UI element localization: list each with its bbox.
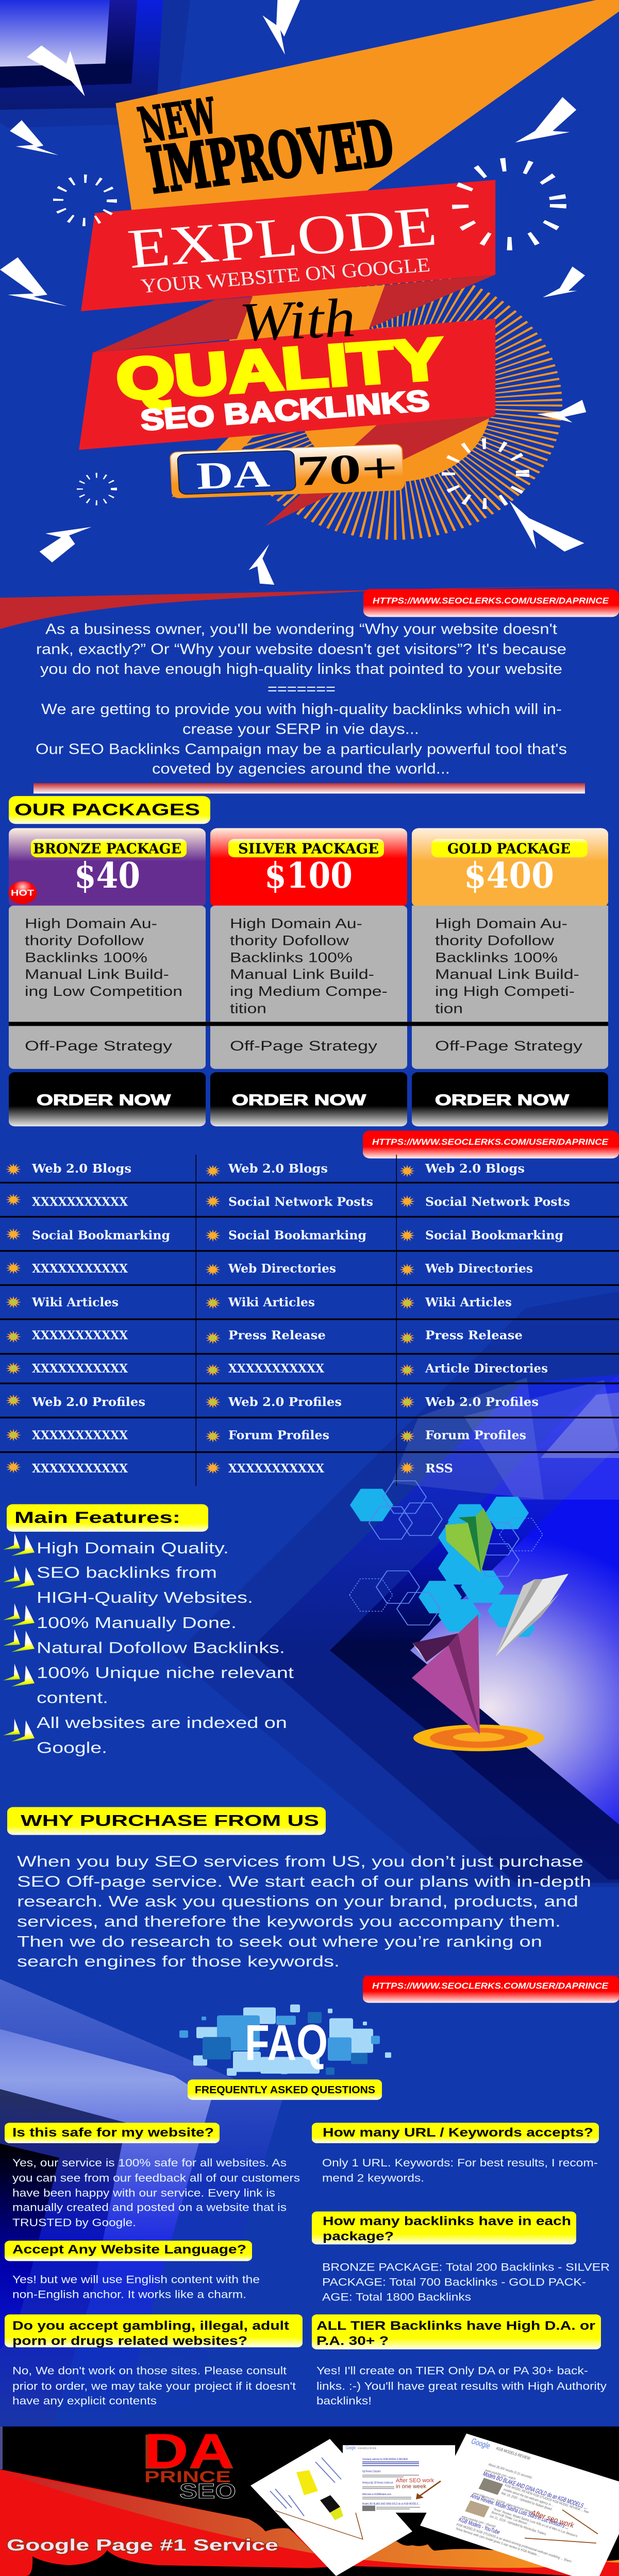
screenshot: center page: Working at kgb: 320 Reviews | Indeed.com xyxy=(362,2481,393,2484)
bronze features xyxy=(9,906,206,1069)
heading: frequently asked questions xyxy=(188,2079,382,2100)
gold order button xyxy=(412,1072,608,1126)
list column 3: RSS xyxy=(425,1462,453,1476)
script word: with: With xyxy=(238,287,357,352)
list column 3: Article Directories xyxy=(425,1362,548,1376)
list icons: stars xyxy=(6,1163,415,1474)
list column 1: Web 2.0 Blogs xyxy=(31,1162,131,1176)
screenshot: right page: www.youtube.com › watch xyxy=(484,2468,516,2481)
silver features: Off-Page Strategy xyxy=(230,1039,377,1054)
list column 1: XXXXXXXXXXX xyxy=(32,1428,128,1443)
screenshot: right page: models about the top webcam agency in ... xyxy=(503,2487,555,2507)
link button 1 xyxy=(363,589,619,617)
heading: frequently asked questions: FREQUENTLY ASKED QUESTIONS xyxy=(195,2083,375,2095)
list column 1 xyxy=(31,1162,170,1476)
bronze label: BRONZE PACKAGE xyxy=(33,841,181,857)
heading: our packages: OUR PACKAGES xyxy=(14,800,200,819)
list column 2: Social Bookmarking xyxy=(228,1228,366,1243)
list column 3: Forum Profiles xyxy=(425,1428,526,1443)
intro text: As a business owner, you'll be wondering “Why your website doesn't xyxy=(45,620,557,637)
gold features: High Domain Au- xyxy=(435,916,567,931)
faq: tier backlinks: backlinks! xyxy=(316,2395,372,2407)
screenshot: right page: KGB MODELS! KGB STUDIOS is an award-winning professional webcam modeling ... Sherri xyxy=(456,2522,573,2564)
faq: gambling: prior to order, we may take your project if it doesn't xyxy=(12,2381,296,2393)
screenshot: right page: Jun 21, 2019 - Uploaded by Movieclips Trailers xyxy=(489,2514,547,2536)
why purchase text: When you buy SEO services from US, you don’t just purchase xyxy=(17,1853,583,1870)
intro text xyxy=(36,620,567,777)
faq: how many url: How many URL / Keywords accepts? xyxy=(323,2125,593,2139)
gold features: ing High Competi- xyxy=(435,984,575,999)
screenshot: right page: KGB Models - YouTube xyxy=(458,2516,501,2535)
silver features: Manual Link Build- xyxy=(230,967,374,982)
screenshot: center page: Welcome to KGBModels.com xyxy=(362,2493,391,2496)
pricing panel: silver xyxy=(210,828,407,1126)
faq: is this safe: Yes, our service is 100% safe for all websites. As xyxy=(12,2157,287,2170)
target xyxy=(413,1724,544,1751)
silver price: $100 xyxy=(264,855,353,896)
faq: tier backlinks: Yes! I'll create on TIER Only DA or PA 30+ back- xyxy=(316,2365,588,2377)
bronze features: Backlinks 100% xyxy=(25,951,147,965)
list column 2 xyxy=(228,1162,373,1476)
list column 3: Wiki Articles xyxy=(425,1295,512,1310)
faq: gambling: No, We don't work on those sites. Please consult xyxy=(12,2365,287,2377)
feature list: Google. xyxy=(37,1739,107,1756)
list column 2: Wiki Articles xyxy=(228,1295,315,1310)
list column 2: Social Network Posts xyxy=(228,1195,373,1209)
list column 3: Press Release xyxy=(425,1328,523,1343)
logo: da prince seo: DA xyxy=(141,2424,235,2479)
faq: how many backlinks: How many backlinks have in each xyxy=(323,2214,571,2228)
DA 70+ badge: DA xyxy=(195,452,271,498)
feature list: SEO backlinks from xyxy=(37,1564,217,1582)
pricing panel: bronze xyxy=(8,828,206,1126)
silver order button: ORDER NOW xyxy=(232,1092,366,1109)
screenshot: right page: "Anna" Review: Model Sasha Luss Kills a Lot of Men in Luc Besson's xyxy=(492,2507,578,2538)
faq: gambling: have any explicit contents xyxy=(12,2395,157,2407)
silver features: High Domain Au- xyxy=(230,916,362,931)
feature list: Natural Dofollow Backlinks. xyxy=(37,1639,285,1656)
silver features: Backlinks 100% xyxy=(230,951,353,965)
faq: tier backlinks: ALL TIER Backlinks have High D.A. or xyxy=(316,2318,595,2332)
faq: website language: Yes! but we will use English content with the xyxy=(12,2274,260,2286)
hot badge: HOT xyxy=(11,888,34,897)
hexagon cluster xyxy=(349,1481,543,1637)
headline: quality seo backlinks: SEO BACKLINKS xyxy=(139,384,431,437)
faq: tier backlinks: links. :-) You'll have great results with High Authority xyxy=(316,2381,607,2393)
footer tagline: Google Page #1 Service xyxy=(7,2536,278,2554)
heading: main features xyxy=(7,1504,208,1532)
gold label: GOLD PACKAGE xyxy=(447,841,571,857)
services list xyxy=(0,1155,619,1486)
intro text: coveted by agencies around the world... xyxy=(152,760,450,777)
logo: da prince seo: SEO xyxy=(179,2479,236,2503)
faq: is this safe: have been happy with our service. Every link is xyxy=(12,2188,275,2199)
faq: tier backlinks: P.A. 30+ ? xyxy=(316,2333,389,2348)
list column 2: XXXXXXXXXXX xyxy=(228,1462,324,1476)
why purchase text: services, and therefore the keywords you accompany them. xyxy=(17,1913,561,1930)
list column 2: Web Directories xyxy=(228,1262,336,1276)
screenshot: left page xyxy=(250,2439,412,2576)
why purchase text: search engines for those keywords. xyxy=(17,1953,340,1970)
faq: how many url xyxy=(312,2123,599,2184)
gold features: Off-Page Strategy xyxy=(435,1039,582,1054)
faq: is this safe: manually created and posted on a website that is xyxy=(12,2202,287,2214)
list column 3: Web 2.0 Profiles xyxy=(425,1395,539,1409)
screenshot: center page: After SEO work xyxy=(396,2477,434,2484)
icon: faq cluster xyxy=(179,2005,391,2076)
faq: how many url: Only 1 URL. Keywords: For best results, I recom- xyxy=(322,2157,598,2170)
intro text: rank, exactly?” Or “Why your website doesn't get visitors”? It's because xyxy=(36,640,566,657)
footer xyxy=(0,2424,619,2576)
bronze features: thority Dofollow xyxy=(25,933,144,948)
headline: new improved: NEW xyxy=(133,88,222,154)
list column 1: Social Bookmarking xyxy=(32,1228,170,1243)
intro text: crease your SERP in vie days... xyxy=(182,720,419,737)
screenshot: right page: Google xyxy=(470,2436,492,2450)
gold features: Manual Link Build- xyxy=(435,967,579,982)
bronze price: $40 xyxy=(74,855,140,896)
feature list: content. xyxy=(37,1689,108,1706)
list column 1: XXXXXXXXXXX xyxy=(32,1195,128,1209)
screenshot: right page: About 28,300 results (0.31 seconds) xyxy=(488,2462,533,2480)
bronze features: High Domain Au- xyxy=(25,916,157,931)
intro text: you do not have enough high-quality links that pointed to your website xyxy=(40,660,562,677)
faq: how many backlinks: BRONZE PACKAGE: Total 200 Backlinks - SILVER xyxy=(322,2262,610,2274)
faq background shapes xyxy=(0,1979,282,2426)
why purchase text xyxy=(17,1853,591,1970)
silver features xyxy=(210,906,407,1069)
logo: da prince seo: DA xyxy=(144,2424,233,2478)
list column 2: XXXXXXXXXXX xyxy=(228,1362,324,1376)
heading: why purchase from us: WHY PURCHASE FROM US xyxy=(21,1812,319,1829)
screenshot: right page: After seo work xyxy=(529,2509,576,2530)
gold features: Backlinks 100% xyxy=(435,951,558,965)
screenshot: right page: Mar 19, 2020 - Uploaded by Robert Breed xyxy=(500,2491,553,2511)
package divider xyxy=(9,1022,608,1026)
screenshot: center page: in one week xyxy=(396,2483,427,2489)
list column 1: XXXXXXXXXXX xyxy=(32,1462,128,1476)
top-left corner layered panel xyxy=(0,0,190,128)
faq: is this safe: Is this safe for my website? xyxy=(12,2125,214,2139)
screenshot: right page: www.youtube.com › channel xyxy=(460,2514,496,2529)
logo: da prince seo: PRINCE xyxy=(144,2468,231,2486)
list column 1: Wiki Articles xyxy=(31,1295,119,1310)
ribbon folds and banners xyxy=(79,0,619,526)
feature bullets xyxy=(3,1533,35,1741)
why purchase text: research. We ask you questions on your brand, products, and xyxy=(17,1893,578,1910)
bronze order button xyxy=(9,1072,206,1126)
headline: new improved xyxy=(133,88,399,208)
faq: how many backlinks: AGE: Total 1800 Backlinks xyxy=(322,2292,471,2303)
faq: gambling: porn or drugs related websites? xyxy=(12,2333,247,2348)
list column 3: Social Bookmarking xyxy=(425,1228,563,1243)
heading: why purchase from us xyxy=(7,1807,326,1835)
red swoosh xyxy=(0,585,619,629)
icon: faq cluster: FAQ xyxy=(245,2015,328,2071)
bronze features: Manual Link Build- xyxy=(25,967,169,982)
faq: gambling: Do you accept gambling, illegal, adult xyxy=(12,2318,289,2332)
faq: is this safe: you can see from our feedback all of our customers xyxy=(12,2173,300,2184)
screenshot: center page: Scholarly articles for KGB MODELS REVIEW xyxy=(362,2458,408,2461)
list column 1: XXXXXXXXXXX xyxy=(32,1262,128,1276)
faq: how many url: mend 2 keywords. xyxy=(322,2173,424,2184)
silver features: ing Medium Compe- xyxy=(230,984,388,999)
gold features xyxy=(412,902,608,1069)
feature list: High Domain Quality. xyxy=(37,1539,229,1557)
bronze order button: ORDER NOW xyxy=(37,1092,171,1109)
intro text: Our SEO Backlinks Campaign may be a particularly powerful tool that's xyxy=(36,740,567,757)
screenshot: right page xyxy=(420,2433,619,2576)
link button 2 xyxy=(363,1130,619,1159)
faq: tier backlinks xyxy=(312,2314,607,2407)
list column 2: Forum Profiles xyxy=(228,1428,329,1443)
lightning bolts xyxy=(0,0,586,585)
headline: quality seo backlinks: QUALITY xyxy=(113,326,446,412)
list column 3: Web Directories xyxy=(425,1262,533,1276)
footer red waves xyxy=(0,2469,619,2576)
feature list: 100% Manually Done. xyxy=(37,1614,237,1632)
orange sunburst xyxy=(266,300,524,509)
intro text: We are getting to provide you with high-quality backlinks which will in- xyxy=(41,700,562,717)
gold order button: ORDER NOW xyxy=(435,1092,569,1109)
faq: how many backlinks: package? xyxy=(323,2229,394,2243)
silver features: thority Dofollow xyxy=(230,933,349,948)
silver features: tition xyxy=(230,1001,266,1016)
silver order button xyxy=(210,1072,407,1126)
small bursts xyxy=(58,164,558,504)
list column 1: Web 2.0 Profiles xyxy=(31,1395,145,1409)
feature list xyxy=(3,1533,294,1756)
screenshot: right page: Bond KGB Thriller. Luc Besson ... xyxy=(491,2510,531,2527)
list column 1: XXXXXXXXXXX xyxy=(32,1328,128,1343)
heading: main features: Main Features: xyxy=(14,1509,180,1527)
gold features: thority Dofollow xyxy=(435,933,554,948)
feature list: HIGH-Quality Websites. xyxy=(37,1589,253,1606)
gold price: $400 xyxy=(464,855,554,896)
feature list: 100% Unique niche relevant xyxy=(37,1664,294,1682)
screenshot: center page: Google xyxy=(346,2446,356,2451)
screenshot: right page: KGB MODELS REVIEW xyxy=(495,2446,531,2461)
why purchase text: SEO Off-page service. We start each of our plans with in-depth xyxy=(17,1873,591,1890)
silver label: SILVER PACKAGE xyxy=(238,841,379,857)
faq: website language: Accept Any Website Language? xyxy=(12,2242,246,2257)
chevron background xyxy=(174,1291,619,1887)
hot badge xyxy=(8,881,37,904)
faq: gambling xyxy=(5,2314,303,2407)
faq: how many backlinks xyxy=(312,2212,610,2303)
paper plane: green xyxy=(445,1508,493,1573)
screenshot: center page: Kgb Reviews | Glassdoor xyxy=(362,2470,381,2473)
bronze features: Off-Page Strategy xyxy=(25,1039,172,1054)
paper plane: purple xyxy=(412,1614,480,1734)
faq: website language: non-English anchor. It works like a charm. xyxy=(12,2289,246,2301)
faq: is this safe xyxy=(5,2123,300,2229)
logo: da prince seo xyxy=(141,2424,236,2503)
DA 70+ badge xyxy=(170,444,404,499)
list column 3 xyxy=(425,1162,570,1476)
screenshot: center page xyxy=(343,2445,455,2513)
intro text: ======= xyxy=(267,680,336,697)
faq: is this safe: TRUSTED by Google. xyxy=(12,2217,136,2229)
list column 3: Social Network Posts xyxy=(425,1195,570,1209)
screenshot: right page: Nova famous web cam model gives 5 star review to KGB Models ... xyxy=(455,2527,541,2557)
list column 2: Press Release xyxy=(228,1328,326,1343)
red divider bar xyxy=(34,783,585,793)
screenshot: right page: www.indiewire.com › 2019/06 › anna-review-luc-besson xyxy=(473,2491,534,2514)
link button 3 xyxy=(363,1975,619,2003)
gold features: tion xyxy=(435,1001,463,1016)
hero banner xyxy=(0,0,619,585)
bronze features: ing Low Competition xyxy=(25,984,182,999)
list column 2: Web 2.0 Profiles xyxy=(228,1395,342,1409)
list column 3: Web 2.0 Blogs xyxy=(425,1162,525,1176)
feature list: All websites are indexed on xyxy=(37,1714,287,1732)
DA 70+ badge: 70+ xyxy=(296,444,399,495)
pricing panel: gold xyxy=(412,828,608,1126)
list column 2: Web 2.0 Blogs xyxy=(228,1162,328,1176)
paper plane: white xyxy=(495,1574,568,1657)
heading: our packages xyxy=(9,796,210,824)
headline: explode: YOUR WEBSITE ON GOOGLE xyxy=(140,254,431,297)
faq: how many backlinks: PACKAGE: Total 700 Backlinks - GOLD PACK- xyxy=(322,2277,586,2289)
why purchase text: Then we do research to seek out where you’re ranking on xyxy=(17,1934,542,1950)
list column 1: XXXXXXXXXXX xyxy=(32,1362,128,1376)
screenshot: center page: KGB MODELS REVIEW xyxy=(358,2447,377,2450)
headline: explode: EXPLODE xyxy=(125,195,440,280)
faq: website language xyxy=(5,2241,260,2301)
screenshot: center page: Models BO BLAKE AND GINA GOLD do an KGB MODELS ... xyxy=(362,2502,421,2506)
